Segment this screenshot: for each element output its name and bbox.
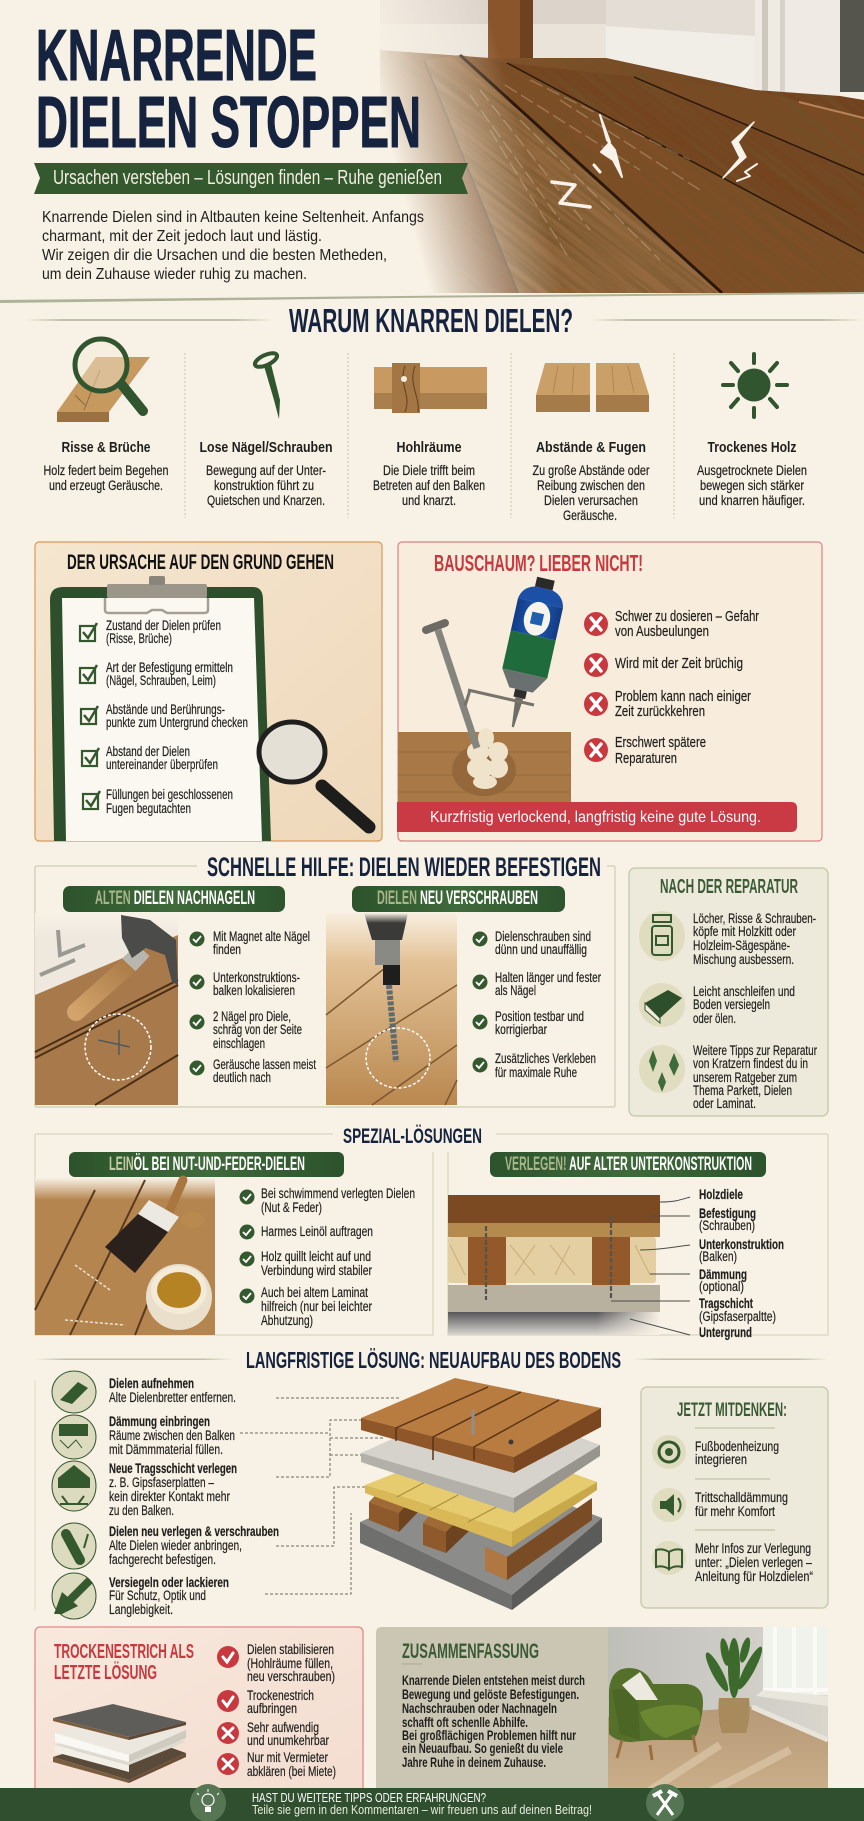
intro text: Knarrende Dielen sind in Altbauten keine Seltenheit. Anfangs xyxy=(42,209,424,226)
diagram labels: (Balken) xyxy=(699,1249,737,1264)
description xyxy=(206,463,326,508)
photo: brush and oil bowl xyxy=(35,1178,215,1335)
step 5: Langlebigkeit. xyxy=(109,1602,173,1617)
list: aufbringen xyxy=(247,1701,297,1716)
call to action text: HAST DU WEITERE TIPPS ODER ERFAHRUNGEN? xyxy=(252,1790,486,1805)
summary text: Bewegung und gelöste Befestigungen. xyxy=(402,1687,579,1702)
diagram: floor cross-section xyxy=(448,1195,690,1335)
list: Leinöl: Holz quillt leicht auf und xyxy=(261,1249,371,1264)
diagram labels: (optional) xyxy=(699,1279,744,1294)
item: Fußbodenheizung xyxy=(652,1435,779,1469)
list: verschrauben: korrigierbar xyxy=(495,1022,547,1037)
window xyxy=(763,1627,828,1695)
label: Lose Nägel/Schrauben xyxy=(200,439,332,456)
summary text xyxy=(402,1673,585,1770)
step 3: z. B. Gipsfaserplatten – xyxy=(109,1475,214,1490)
diagram labels: (Gipsfaserpaltte) xyxy=(699,1309,776,1324)
list: nachnageln: Unterkonstruktions- xyxy=(213,970,300,985)
description: konstruktion führt zu xyxy=(214,478,314,493)
steps xyxy=(52,1371,279,1619)
description: und erzeugt Geräusche. xyxy=(49,478,163,493)
checklist: punkte zum Untergrund checken xyxy=(106,715,248,730)
description: Holz federt beim Begehen xyxy=(44,463,168,478)
list: Leinöl: (Nut & Feder) xyxy=(261,1200,322,1215)
item: Trittschall: für mehr Komfort xyxy=(695,1504,775,1519)
summary text: Bei großflächigen Problemen hilft nur xyxy=(402,1728,577,1743)
panel: langfristige Lösung xyxy=(35,1347,828,1619)
list xyxy=(217,1642,336,1779)
list: nachnageln: Geräusche lassen meist xyxy=(213,1057,316,1072)
list: nachnageln: einschlagen xyxy=(213,1036,265,1051)
insulation xyxy=(365,1440,597,1532)
panel: nach der Reparatur xyxy=(629,868,828,1116)
diagram labels: (Schrauben) xyxy=(699,1218,755,1233)
list of drawbacks: Erschwert spätere xyxy=(615,735,706,751)
icon: jar xyxy=(639,911,685,961)
heading: LANGFRISTIGE LÖSUNG: NEUAUFBAU DES BODENS xyxy=(246,1347,621,1373)
description: Zu große Abstände oder xyxy=(532,463,650,478)
hero photo: wooden floor with door frame xyxy=(380,0,864,293)
diagram labels: Dämmung xyxy=(699,1267,747,1282)
step 4: Dielen neu verlegen & verschrauben xyxy=(109,1524,279,1539)
list of drawbacks: Wird mit der Zeit brüchig xyxy=(615,656,743,672)
step 1 xyxy=(52,1371,236,1413)
list: Sehr aufwendig xyxy=(247,1720,319,1735)
heading: warum knarren: WARUM KNARREN DIELEN? xyxy=(289,302,573,339)
text: weitere Tipps: Thema Parkett, Dielen xyxy=(693,1083,792,1098)
tab: Leinöl: LEINÖL BEI NUT-UND-FEDER-DIELEN xyxy=(109,1154,305,1175)
description xyxy=(44,463,168,493)
heading: ZUSAMMENFASSUNG xyxy=(402,1640,539,1663)
step 2: Räume zwischen den Balken xyxy=(109,1428,235,1443)
call to action text: Teile sie gern in den Kommentaren – wir freuen uns auf deinen Beitrag! xyxy=(252,1802,592,1817)
step 1: Dielen aufnehmen xyxy=(109,1376,194,1391)
heading: SCHNELLE HILFE: DIELEN WIEDER BEFESTIGEN xyxy=(207,852,601,882)
intro text: um dein Zuhause wieder ruhig zu machen. xyxy=(42,266,307,283)
label: Risse & Brüche xyxy=(62,439,150,456)
heading: TROCKENESTRICH ALS xyxy=(54,1641,194,1663)
title xyxy=(36,16,421,163)
step 5 xyxy=(52,1573,229,1619)
text: weitere Tipps: Weitere Tipps zur Reparatur xyxy=(693,1043,817,1058)
list: Trockenestrich xyxy=(247,1688,314,1703)
armchair xyxy=(609,1668,703,1742)
icon: sanding block xyxy=(639,983,685,1027)
description: Geräusche. xyxy=(563,508,617,523)
checklist: Art der Befestigung ermitteln xyxy=(106,660,233,675)
illustration: dry screed layers xyxy=(53,1704,186,1783)
item: Mehr Infos: unter: „Dielen verlegen – xyxy=(695,1555,812,1570)
list: Leinöl: hilfreich (nur bei leichter xyxy=(261,1299,372,1314)
panel: der Ursache auf den Grund gehen xyxy=(35,542,382,841)
list: Nur mit Vermieter xyxy=(247,1750,328,1765)
list: neu verschrauben) xyxy=(247,1669,335,1684)
panel: Trockenestrich xyxy=(35,1627,363,1797)
screed layer xyxy=(361,1400,600,1498)
description: Die Diele trifft beim xyxy=(383,463,475,478)
photo: drill on floorboards xyxy=(326,913,457,1105)
list of drawbacks: Reparaturen xyxy=(615,751,677,767)
description: Ausgetrocknete Dielen xyxy=(697,463,807,478)
intro text: charmant, mit der Zeit jedoch laut und lästig. xyxy=(42,228,322,245)
cause: Lose Nägel xyxy=(200,350,332,508)
checklist: Abstände und Berührungs- xyxy=(106,702,225,717)
step 3 xyxy=(52,1461,237,1518)
heading: JETZT MITDENKEN: xyxy=(677,1400,787,1421)
text: anschleifen: oder ölen. xyxy=(693,1011,736,1026)
tab: alten Dielen nachnageln xyxy=(63,886,285,912)
step 1: Alte Dielenbretter entfernen. xyxy=(109,1390,236,1405)
photo: room with green armchair xyxy=(608,1627,828,1797)
step 4 xyxy=(52,1523,279,1569)
summary text: Jahre Ruhe in deinem Zuhause. xyxy=(402,1755,546,1770)
list: verschrauben: Position testbar und xyxy=(495,1009,584,1024)
floor grain xyxy=(410,52,864,293)
panel: Spezial-Lösungen xyxy=(35,1125,828,1340)
heading: SPEZIAL-LÖSUNGEN xyxy=(343,1125,482,1148)
cause: Trockenes Holz xyxy=(697,354,807,508)
description xyxy=(373,463,485,508)
diagram labels: Tragschicht xyxy=(699,1296,753,1311)
list: verschrauben: Halten länger und fester xyxy=(495,970,601,985)
step 5: Versiegeln oder lackieren xyxy=(109,1575,229,1590)
tab: Dielen neu verschrauben xyxy=(352,886,565,912)
panel: Bauschaum warning xyxy=(397,542,822,841)
text: ausbessern: Mischung ausbessern. xyxy=(693,952,794,967)
list: verschrauben: für maximale Ruhe xyxy=(495,1065,577,1080)
step 3: Neue Tragsschicht verlegen xyxy=(109,1461,237,1476)
intro text: Wir zeigen dir die Ursachen und die besten Metheden, xyxy=(42,247,387,264)
step 4: fachgerecht befestigen. xyxy=(109,1552,216,1567)
tab: verlegen xyxy=(490,1152,766,1177)
icon: magnifier xyxy=(259,722,369,827)
list: Leinöl: Abhutzung) xyxy=(261,1313,313,1328)
icon: crossed hammers xyxy=(646,1784,684,1821)
step 3: kein direkter Kontakt mehr xyxy=(109,1489,230,1504)
list: nachnageln: schräg von der Seite xyxy=(213,1022,302,1037)
diagram labels: Holzdiele xyxy=(699,1187,743,1202)
description: Reibung zwischen den xyxy=(537,478,645,493)
base slab xyxy=(360,1470,602,1595)
cause: Hohlräume xyxy=(373,363,487,508)
description: Quietschen und Knarzen. xyxy=(207,493,325,508)
heading: BAUSCHAUM? LIEBER NICHT! xyxy=(434,550,643,576)
step 3: zu den Balken. xyxy=(109,1503,174,1518)
checklist: Zustand der Dielen prüfen xyxy=(106,618,221,633)
step 2: Dämmung einbringen xyxy=(109,1414,210,1429)
list: Leinöl: Verbindung wird stabiler xyxy=(261,1263,372,1278)
diagram labels xyxy=(699,1187,784,1340)
list: Leinöl: Bei schwimmend verlegten Dielen xyxy=(261,1186,415,1201)
photo: hammer on floorboards xyxy=(35,913,178,1105)
subtitle ribbon xyxy=(34,163,468,194)
text: weitere Tipps: von Kratzern findest du in xyxy=(693,1056,808,1071)
subtitle ribbon: Ursachen versteben – Lösungen finden – Ruhe genießen xyxy=(53,167,442,189)
item: Trittschall: Trittschalldämmung xyxy=(695,1490,788,1505)
list: verschrauben xyxy=(472,929,601,1080)
item: Mehr Infos xyxy=(652,1541,813,1584)
step 2: mit Dämmmaterial füllen. xyxy=(109,1442,223,1457)
icon: cracked plank xyxy=(374,363,487,413)
item: Fußbodenheizung: integrieren xyxy=(695,1452,747,1467)
tab: Dielen neu verschrauben: DIELEN NEU VERSCHRAUBEN xyxy=(377,888,538,909)
list: nachnageln xyxy=(190,929,316,1085)
item: Fußbodenheizung: Fußbodenheizung xyxy=(695,1439,779,1454)
description xyxy=(697,463,807,508)
summary text: ein Neuaufbau. So genießt du viele xyxy=(402,1741,563,1756)
panel: schnelle Hilfe xyxy=(35,852,615,1107)
step 5: Für Schutz, Optik und xyxy=(109,1588,206,1603)
planks xyxy=(361,1378,601,1457)
list of drawbacks: Schwer zu dosieren – Gefahr xyxy=(615,609,759,625)
summary text: Knarrende Dielen entstehen meist durch xyxy=(402,1673,585,1688)
call to action text xyxy=(252,1790,592,1817)
item: Mehr Infos: Mehr Infos zur Verlegung xyxy=(695,1541,811,1556)
list: (Hohlräume füllen, xyxy=(247,1656,333,1671)
list: verschrauben: Dielenschrauben sind xyxy=(495,929,591,944)
item: Trittschall xyxy=(652,1488,788,1522)
list: Leinöl: Auch bei altem Laminat xyxy=(261,1285,368,1300)
icon: nail xyxy=(253,350,280,419)
text: weitere Tipps: unserem Ratgeber zum xyxy=(693,1070,797,1085)
title: DIELEN STOPPEN xyxy=(36,83,421,163)
checklist: Fugen begutachten xyxy=(106,801,191,816)
panel: causes xyxy=(25,302,864,523)
step 4: Alte Dielen wieder anbringen, xyxy=(109,1538,242,1553)
list: verschrauben: als Nägel xyxy=(495,983,536,998)
description: und knarzt. xyxy=(402,493,456,508)
icon: two planks with gap xyxy=(536,363,649,412)
tab: Leinöl xyxy=(69,1152,344,1177)
checklist: (Risse, Brüche) xyxy=(106,631,172,646)
list: abklären (bei Miete) xyxy=(247,1764,336,1779)
text: anschleifen: Leicht anschleifen und xyxy=(693,984,795,999)
list: nachnageln: deutlich nach xyxy=(213,1070,271,1085)
clipboard xyxy=(50,576,271,841)
list of drawbacks: von Ausbeulungen xyxy=(615,624,709,640)
checklist: Füllungen bei geschlossenen xyxy=(106,787,233,802)
list: Leinöl: Harmes Leinöl auftragen xyxy=(261,1224,373,1239)
heading: LETZTE LÖSUNG xyxy=(54,1661,157,1684)
checklist: Abstand der Dielen xyxy=(106,744,190,759)
description: Bewegung auf der Unter- xyxy=(206,463,326,478)
plant xyxy=(718,1698,750,1733)
checklist: (Nägel, Schrauben, Leim) xyxy=(106,673,216,688)
summary text: schafft oft schenlle Abhilfe. xyxy=(402,1715,528,1730)
icon: sun xyxy=(723,354,787,417)
label: Abstände & Fugen xyxy=(536,439,646,456)
description: bewegen sich stärker xyxy=(700,478,804,493)
description xyxy=(532,463,650,523)
checklist: untereinander überprüfen xyxy=(106,757,218,772)
illustration: foam can, nail and board xyxy=(398,574,571,804)
callout banner xyxy=(397,802,797,832)
heading xyxy=(54,1641,194,1684)
diagram: exploded floor layers xyxy=(360,1378,602,1610)
description: Dielen verursachen xyxy=(544,493,638,508)
text: weitere Tipps: oder Laminat. xyxy=(693,1096,756,1111)
icon: light bulb xyxy=(190,1784,226,1821)
panel: Zusammenfassung xyxy=(376,1627,828,1797)
list: nachnageln: balken lokalisieren xyxy=(213,983,295,998)
intro text xyxy=(42,209,424,283)
description: und knarren häufiger. xyxy=(699,493,805,508)
list: Leinöl xyxy=(240,1186,415,1328)
checklist xyxy=(80,618,248,816)
text: anschleifen: Boden versiegeln xyxy=(693,997,770,1012)
label: Hohlräume xyxy=(396,439,462,456)
title: KNARRENDE xyxy=(36,16,317,96)
diagram labels: Befestigung xyxy=(699,1206,756,1221)
list: nachnageln: finden xyxy=(213,942,241,957)
cause: Abstände xyxy=(532,363,650,523)
list: verschrauben: dünn und unauffällig xyxy=(495,942,587,957)
summary text: Nachschrauben oder Nachnageln xyxy=(402,1701,557,1716)
list: und unumkehrbar xyxy=(247,1733,329,1748)
list: nachnageln: Mit Magnet alte Nägel xyxy=(213,929,310,944)
footer bar xyxy=(0,1784,864,1821)
icon: magnifier on plank xyxy=(57,339,150,422)
text: ausbessern: köpfe mit Holzkitt oder xyxy=(693,924,796,939)
step 2 xyxy=(52,1414,235,1459)
callout banner: Kurzfristig verlockend, langfristig keine gute Lösung. xyxy=(430,809,761,826)
icon: white squeak marks xyxy=(552,115,757,207)
panel: jetzt mitdenken xyxy=(641,1387,828,1608)
label: Trockenes Holz xyxy=(708,439,796,456)
text: ausbessern xyxy=(693,911,816,967)
cause: Risse und Brüche xyxy=(44,339,168,493)
panel: hero header xyxy=(34,0,864,293)
diagram labels: Unterkonstruktion xyxy=(699,1237,784,1252)
list of drawbacks: Problem kann nach einiger xyxy=(615,689,751,705)
description: Betreten auf den Balken xyxy=(373,478,485,493)
diagram labels: Untergrund xyxy=(699,1325,752,1340)
text: weitere Tipps xyxy=(693,1043,817,1111)
list: verschrauben: Zusätzliches Verkleben xyxy=(495,1051,596,1066)
beams xyxy=(369,1478,420,1513)
icon: sparkles xyxy=(639,1045,685,1093)
list: Dielen stabilisieren xyxy=(247,1642,334,1657)
heading: DER URSACHE AUF DEN GRUND GEHEN xyxy=(67,551,334,574)
text: ausbessern: Holzleim-Sägespäne- xyxy=(693,938,790,953)
tab: alten Dielen nachnageln: ALTEN DIELEN NACHNAGELN xyxy=(95,888,255,909)
text: ausbessern: Löcher, Risse & Schrauben- xyxy=(693,911,816,926)
list of drawbacks: Zeit zurückkehren xyxy=(615,704,705,720)
item: Mehr Infos: Anleitung für Holzdielen“ xyxy=(695,1569,813,1584)
text: anschleifen xyxy=(693,984,795,1026)
list: nachnageln: 2 Nägel pro Diele, xyxy=(213,1009,291,1024)
list of drawbacks xyxy=(584,609,759,767)
